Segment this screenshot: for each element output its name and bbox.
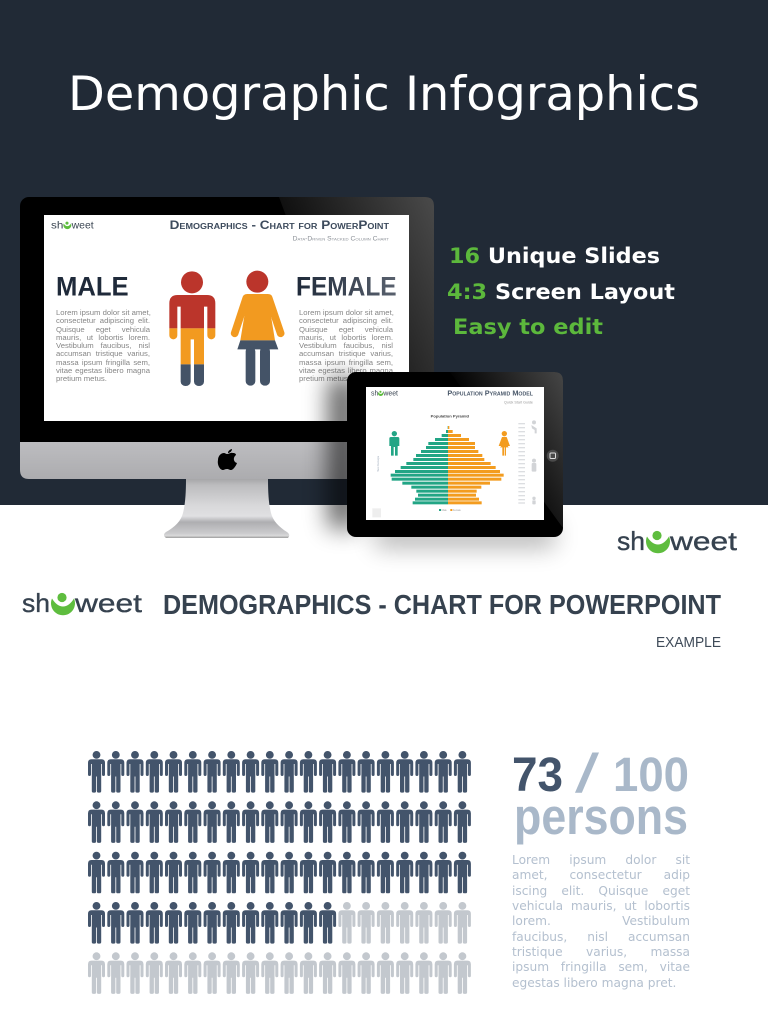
male paragraph: Quisque eget vehicula — [56, 324, 150, 334]
tablet — [347, 372, 563, 537]
tablet heading: Population Pyramid Model — [447, 391, 533, 398]
population pyramid: male bars — [391, 426, 448, 504]
logo: heading — [22, 588, 143, 618]
female paragraph: vitae egestas libero magna — [299, 366, 393, 375]
tablet shadow: bottom — [375, 522, 555, 548]
logo: heading: sh — [22, 588, 50, 618]
dark header background — [0, 0, 768, 505]
icon: teal male — [389, 431, 399, 456]
male paragraph — [56, 308, 151, 383]
statistic description: lorem. Vestibulum — [512, 914, 690, 928]
chart legend: Male — [442, 510, 447, 512]
male paragraph: massa ipsum fringilla sem, — [56, 358, 150, 366]
female paragraph: Quisque eget vehicula — [299, 324, 393, 334]
male paragraph: mauris, ut lobortis lorem. — [56, 333, 150, 342]
slide logo: weet — [71, 221, 94, 232]
statistic description: tristique varius, massa — [512, 945, 690, 959]
pictogram row 1 — [88, 751, 471, 793]
statistic description: iscing elit. Quisque eget — [512, 884, 690, 898]
pictogram row 3 — [88, 852, 471, 893]
female paragraph: consectetur adipiscing elit. — [299, 316, 393, 325]
statistic description — [512, 853, 690, 990]
tablet shadow: left — [328, 378, 358, 528]
slide subheading: Data-Driven Stacked Column Chart — [293, 235, 390, 242]
male paragraph: pretium metus. — [56, 374, 107, 383]
feature list: 16 Unique Slides — [449, 244, 660, 268]
female paragraph — [299, 308, 394, 383]
icon: male figure — [169, 271, 215, 386]
title: Demographic Infographics — [68, 67, 700, 122]
pictogram row 5 — [88, 952, 471, 994]
statistic description: amet, consectetur adip — [512, 868, 690, 882]
statistic description: ipsum fringilla sem, vitae — [512, 960, 690, 974]
female paragraph: mauris, ut lobortis lorem. — [299, 333, 393, 342]
statistic: 73 / 100: / — [575, 742, 600, 804]
female paragraph: pretium metus. — [299, 374, 350, 383]
statistic description: egestas libero magna pret. — [512, 976, 676, 990]
male paragraph: accumsan tristique varius, — [56, 349, 150, 358]
population pyramid: female bars — [448, 426, 504, 504]
chart legend — [439, 509, 461, 512]
icon: apple logo — [218, 449, 237, 470]
section subheading: EXAMPLE — [656, 635, 721, 651]
slide logo: sh — [51, 221, 63, 232]
statistic description: faucibus, nisl accumsan — [512, 930, 690, 944]
icons: age silhouettes — [531, 420, 537, 504]
statistic description: Lorem ipsum dolor sit — [512, 853, 690, 867]
slide logo — [51, 221, 94, 232]
tablet logo: weet — [382, 391, 398, 398]
axis label: Sex Groups — [376, 455, 380, 472]
statistic: 73 / 100 — [512, 742, 689, 804]
MALE label: MALE — [56, 272, 129, 302]
male paragraph: vitae egestas libero magna — [56, 366, 150, 375]
statistic: 73 / 100: 100 — [613, 749, 689, 802]
statistic description: vehicula mauris, ut lobortis — [512, 899, 690, 913]
female paragraph: massa ipsum fringilla sem, — [299, 358, 393, 366]
age labels — [518, 423, 525, 504]
tablet subheading: Quick Start Guide — [504, 400, 533, 404]
male paragraph: Lorem ipsum dolor sit amet, — [56, 308, 151, 317]
tablet slide content — [371, 391, 537, 517]
section heading: DEMOGRAPHICS - CHART FOR POWERPOINT — [163, 589, 721, 620]
FEMALE label: FEMALE — [296, 272, 397, 302]
female paragraph: accumsan tristique varius, — [299, 349, 393, 358]
slide heading: Demographics - Chart for PowerPoint — [170, 218, 389, 232]
feature list: Easy to edit — [453, 315, 603, 339]
chart legend: Female — [453, 510, 461, 512]
tablet logo: sh — [371, 391, 378, 398]
logo: top right — [617, 526, 738, 556]
male paragraph: Vestibulum faucibus, nisl — [56, 341, 150, 350]
logo: top right: weet — [669, 526, 738, 556]
male paragraph: consectetur adipiscing elit. — [56, 316, 150, 325]
logo: top right: sh — [617, 526, 645, 556]
pictogram row 2 — [88, 801, 471, 843]
icon: female figure — [235, 271, 281, 386]
female paragraph: Lorem ipsum dolor sit amet, — [299, 308, 394, 317]
icon: home button — [547, 450, 559, 462]
female paragraph: Vestibulum faucibus, nisl — [299, 341, 393, 350]
chart title: Population Pyramid — [431, 413, 470, 418]
slide content — [51, 218, 397, 386]
icon: orange female — [499, 431, 510, 456]
statistic: 73 / 100: 73 — [512, 749, 563, 802]
logo: heading: weet — [74, 588, 143, 618]
monitor stand — [164, 479, 289, 538]
pictogram row 4 — [88, 902, 471, 944]
feature list — [447, 244, 675, 339]
statistic label: persons: persons — [514, 788, 688, 845]
tablet logo — [371, 391, 398, 398]
monitor — [20, 197, 434, 479]
feature list: 4:3 Screen Layout — [447, 280, 675, 304]
slide number box — [372, 508, 381, 517]
